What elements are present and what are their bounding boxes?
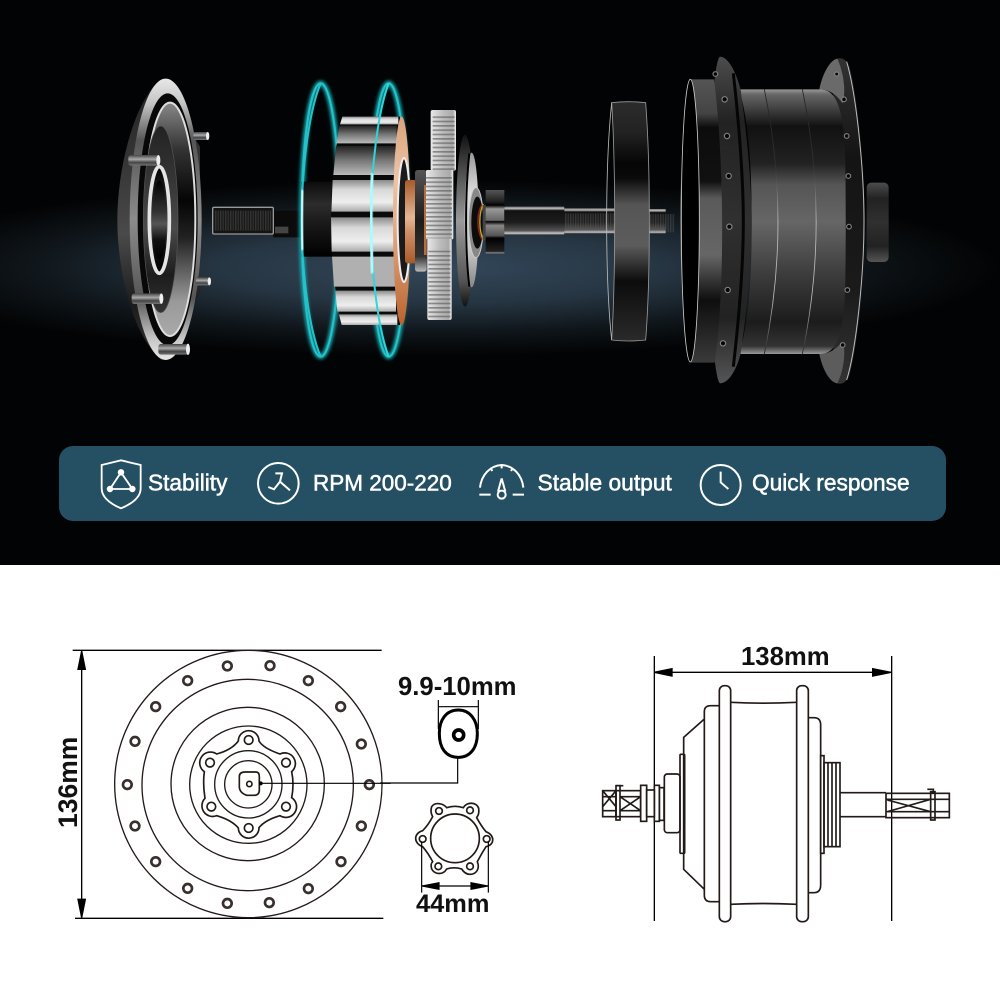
copper disc: [393, 117, 417, 325]
width bracket: [438, 700, 478, 729]
white lower panel: [0, 565, 1000, 1000]
axle detail: [380, 700, 493, 893]
label: 138mm: 138mm: [741, 643, 830, 671]
hub body: [739, 89, 846, 354]
gear stack: [426, 110, 456, 320]
central shaft: [486, 190, 675, 253]
leader line: [261, 782, 391, 785]
label: 44mm: 44mm: [416, 890, 489, 918]
front view technical drawing: [73, 650, 391, 918]
left threaded shaft: [213, 207, 302, 237]
dimension 136mm lines: [73, 650, 383, 918]
leader elbow: [380, 758, 458, 783]
feature bar: [59, 446, 946, 521]
background glow: [0, 180, 1000, 356]
dimension 44mm lines: [422, 842, 488, 893]
label: RPM: RPM 200-220: [313, 470, 452, 496]
cyan ring behind rotor: [302, 83, 407, 357]
stator ring: [607, 102, 649, 341]
label: Stable output: Stable output: [538, 470, 673, 496]
left cup: [680, 79, 722, 363]
icon: rpm fan: [258, 463, 299, 504]
spoke holes: [713, 72, 851, 347]
side view technical drawing: [603, 656, 949, 922]
label: 136mm: 136mm: [53, 737, 83, 828]
planetary gears: [415, 110, 487, 320]
axle stub: [867, 183, 889, 262]
hub shell: [680, 57, 889, 384]
left axle: [603, 785, 664, 821]
spoke holes: [123, 661, 374, 908]
exploded motor: right components: [486, 57, 889, 384]
right side cover: [808, 718, 840, 893]
six-bolt flange: [200, 731, 297, 838]
rotor core: [302, 117, 417, 325]
right axle: [840, 789, 949, 820]
label: Stability: Stability: [148, 470, 228, 496]
dark background panel: [0, 0, 1000, 565]
label: 9.9-10mm: 9.9-10mm: [398, 673, 517, 701]
end cap: [117, 79, 211, 360]
bright ring arcs in front of rotor: [302, 83, 389, 357]
exploded motor: left components: [117, 79, 487, 360]
flange groove: [733, 73, 743, 367]
right flange: [819, 58, 865, 384]
dimension 138mm lines: [654, 656, 892, 921]
left side cover: [664, 706, 719, 902]
icon: clock: [701, 465, 741, 505]
carrier disc: [456, 135, 487, 307]
icon: gauge: [479, 465, 524, 499]
label: Quick response: Quick response: [752, 470, 910, 496]
icon: shield stability: [102, 460, 141, 508]
oval axle section: [439, 710, 477, 757]
hub body outline: [731, 702, 797, 904]
axle key: [239, 772, 263, 795]
rotor teeth: [331, 117, 398, 325]
outer circles: [115, 650, 382, 918]
left flange: [708, 57, 752, 383]
hub flanges: [719, 686, 808, 922]
six-bolt flange detail: [416, 803, 493, 874]
end cap pins: [128, 132, 211, 355]
